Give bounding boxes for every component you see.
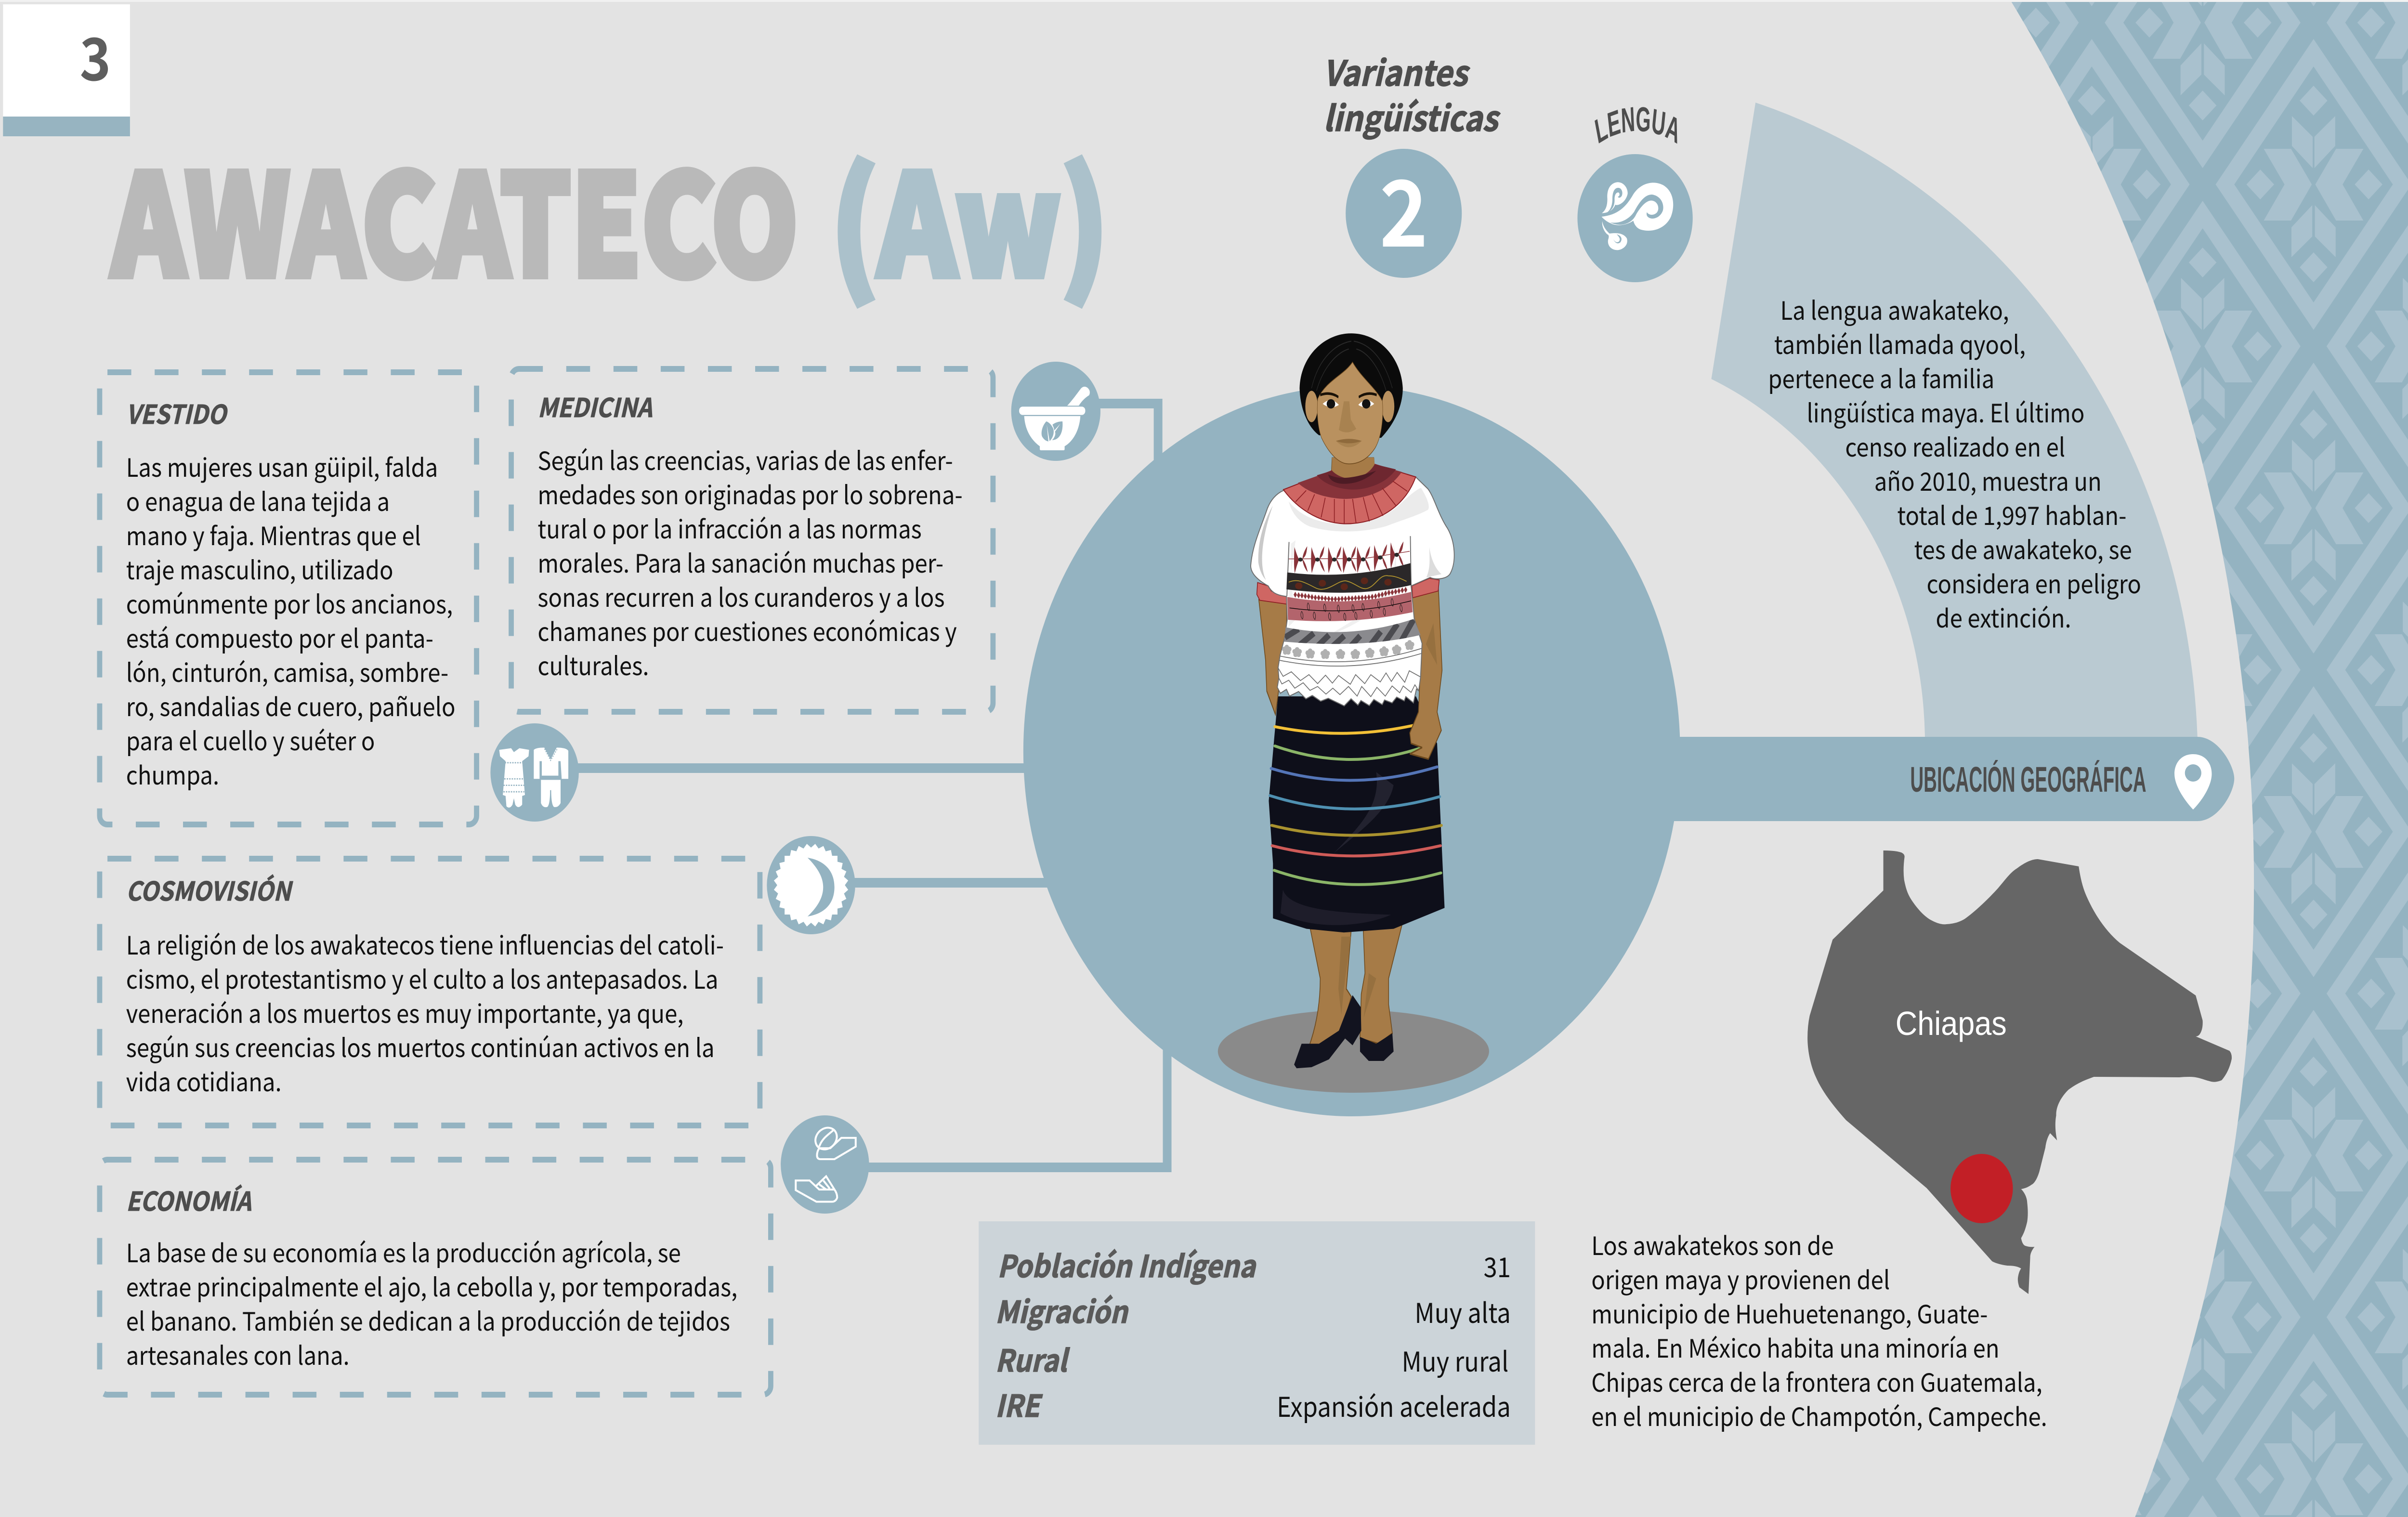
row: población indígena: Población Indígena xyxy=(997,1242,1257,1286)
economía text: extrae principalmente el ajo, la cebolla y, por temporadas, xyxy=(126,1268,737,1304)
row: IRE: IRE xyxy=(995,1382,1043,1426)
row: rural xyxy=(995,1336,1508,1381)
economía heading: ECONOMÍA xyxy=(126,1180,251,1218)
language text: considera en peligro xyxy=(1927,564,2141,601)
location text: Chipas cerca de la frontera con Guatemala, xyxy=(1591,1363,2042,1399)
map: Chiapas xyxy=(1807,850,2232,1294)
location text: mala. En México habita una minoría en xyxy=(1591,1329,2000,1365)
variantes lingüísticas heading: lingüísticas xyxy=(1323,91,1501,141)
location marker xyxy=(1950,1154,2013,1223)
cosmovisión text: vida cotidiana. xyxy=(126,1062,282,1099)
vestido text: comúnmente por los ancianos, xyxy=(126,585,453,621)
title: (Aw) xyxy=(831,115,1108,316)
medicina text: medades son originadas por lo sobrena- xyxy=(537,475,963,512)
figure shadow xyxy=(1218,1010,1489,1093)
economía text: el banano. También se dedican a la producción de tejidos xyxy=(126,1302,730,1338)
cosmovisión text: cismo, el protestantismo y el culto a los antepasados. La xyxy=(126,960,719,996)
row: IRE: Expansión acelerada xyxy=(1277,1386,1511,1425)
cosmovisión text: La religión de los awakatecos tiene influencias del catoli- xyxy=(126,926,724,962)
cosmovisión text: veneración a los muertos es muy importante, ya que, xyxy=(126,994,683,1031)
icon: location pin xyxy=(2174,754,2212,810)
blouse xyxy=(1251,458,1454,706)
language text: también llamada qyool, xyxy=(1774,325,2026,362)
row: población indígena xyxy=(997,1242,1511,1286)
cosmovisión heading: COSMOVISIÓN xyxy=(126,870,293,908)
variantes number badge: 2 xyxy=(1379,141,1428,274)
variantes number badge xyxy=(1346,141,1462,278)
panel: medicina xyxy=(511,369,993,712)
row: migración: Muy alta xyxy=(1414,1292,1511,1331)
location text: en el municipio de Champotón, Campeche. xyxy=(1591,1397,2047,1434)
row: rural: Rural xyxy=(995,1336,1070,1381)
language text: censo realizado en el xyxy=(1845,428,2065,464)
row: IRE xyxy=(995,1382,1511,1426)
row: población indígena: 31 xyxy=(1484,1246,1511,1285)
row: migración: Migración xyxy=(995,1288,1129,1332)
icon: mortar and pestle xyxy=(1011,362,1100,461)
panel: economía xyxy=(100,1160,771,1395)
lengua curved label: LENGUA xyxy=(1595,107,1677,144)
economía text: artesanales con lana. xyxy=(126,1336,350,1373)
row: migración xyxy=(995,1288,1511,1332)
medicina text: culturales. xyxy=(537,646,649,683)
geographic location banner xyxy=(1663,737,2234,821)
vestido text: Las mujeres usan güipil, falda xyxy=(126,448,438,484)
vestido text: o enagua de lana tejida a xyxy=(126,482,390,519)
medicina text: tural o por la infracción a las normas xyxy=(537,510,922,546)
panel: vestido xyxy=(100,372,477,824)
vestido text: para el cuello y suéter o xyxy=(126,721,375,758)
language panel xyxy=(1711,103,2198,737)
striped grey band xyxy=(1284,619,1421,644)
row: rural: Muy rural xyxy=(1402,1341,1508,1380)
butterfly embroidery row xyxy=(1289,541,1410,573)
icon: lengua swirl xyxy=(1577,154,1693,282)
vestido text: traje masculino, utilizado xyxy=(126,550,393,587)
vestido heading: VESTIDO xyxy=(126,393,229,432)
icon: sun and moon xyxy=(767,836,855,934)
language text: año 2010, muestra un xyxy=(1874,462,2102,498)
vestido text: lón, cinturón, camisa, sombre- xyxy=(126,653,448,690)
medicina text: sonas recurren a los curanderos y a los xyxy=(537,578,945,615)
lengua curved label xyxy=(1595,107,1677,144)
location text: municipio de Huehuetenango, Guate- xyxy=(1591,1295,1988,1331)
woven pattern band xyxy=(1950,0,2408,1517)
vestido text: mano y faja. Mientras que el xyxy=(126,516,421,553)
economía text: La base de su economía es la producción agrícola, se xyxy=(126,1233,681,1270)
flowers row xyxy=(1282,640,1414,659)
language text: de extinción. xyxy=(1936,599,2071,635)
geographic location banner: UBICACIÓN GEOGRÁFICA xyxy=(1910,759,2146,799)
Chiapas label: Chiapas xyxy=(1896,1005,2007,1043)
vestido text: ro, sandalias de cuero, pañuelo xyxy=(126,687,456,724)
language text: La lengua awakateko, xyxy=(1780,291,2009,327)
medicina heading: MEDICINA xyxy=(537,387,653,425)
language text: tes de awakateko, se xyxy=(1914,530,2132,567)
vestido text: está compuesto por el panta- xyxy=(126,619,433,655)
cosmovisión text: según sus creencias los muertos continúan activos en la xyxy=(126,1028,715,1065)
language text: pertenece a la familia xyxy=(1768,359,1994,396)
collar xyxy=(1283,458,1416,524)
page number tab: 3 xyxy=(80,13,111,98)
black wave band xyxy=(1286,563,1411,593)
connector lines xyxy=(572,404,1167,1167)
medicina text: chamanes por cuestiones económicas y xyxy=(537,612,957,649)
icon: hands with produce xyxy=(781,1115,869,1214)
vestido text: chumpa. xyxy=(126,756,219,792)
location text: origen maya y provienen del xyxy=(1591,1260,1890,1297)
icon: traditional clothes xyxy=(490,723,579,822)
variantes lingüísticas heading: Variantes xyxy=(1323,46,1470,96)
central circle xyxy=(1023,386,1680,1116)
lower body and skirt xyxy=(1259,587,1445,1068)
title: AWACATECO xyxy=(110,115,798,316)
population data table xyxy=(979,1221,1535,1445)
language text: lingüística maya. El último xyxy=(1806,393,2085,430)
page number tab xyxy=(3,4,130,136)
language text: total de 1,997 hablan- xyxy=(1897,496,2127,533)
panel: cosmovisión xyxy=(100,859,760,1125)
medicina text: Según las creencias, varias de las enfer- xyxy=(537,441,953,478)
figure: woman in traditional dress xyxy=(1218,333,1489,1093)
pink leaf band xyxy=(1287,587,1413,621)
location text: Los awakatekos son de xyxy=(1591,1226,1834,1263)
arms xyxy=(1259,597,1287,715)
head xyxy=(1299,333,1403,464)
medicina text: morales. Para la sanación muchas per- xyxy=(537,544,943,580)
lace hem lines xyxy=(1278,649,1422,697)
